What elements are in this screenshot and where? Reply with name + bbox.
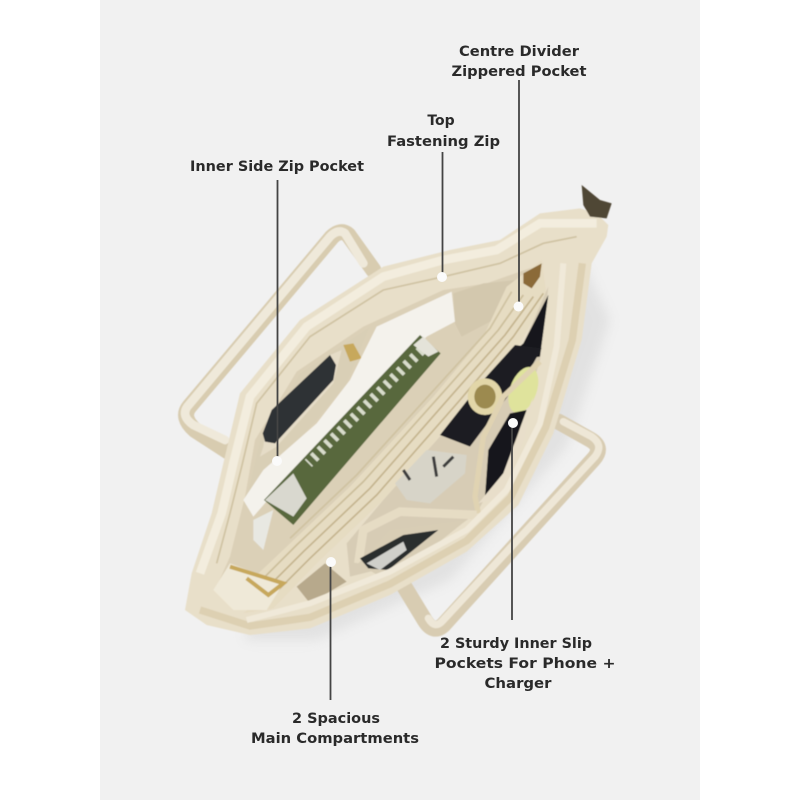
tote bag illustration [185,185,612,640]
bag shadow [243,263,610,640]
black phone item [440,345,542,447]
dark item in pocket [360,530,438,570]
centre divider with zipper [243,260,547,613]
front handle [403,422,599,629]
inner side zip pocket [247,327,370,497]
front rim band [247,263,563,620]
upper compartment interior [217,263,543,587]
label: slip pockets: 2 Sturdy Inner Slip [440,636,592,652]
label: main compartments: 2 Spacious [292,711,380,727]
top rim [200,223,597,573]
label: centre divider zippered pocket: Centre Divider [459,44,579,60]
leader line: centre divider [514,80,524,312]
earphones box [395,450,467,503]
pocket lining [260,350,342,457]
label: slip pockets: Pockets For Phone + [434,656,616,672]
gold coin charm [468,378,502,415]
leader line: top fastening zip [437,152,447,282]
label: main compartments [251,711,419,747]
leader line: slip pockets [508,418,518,620]
label: top fastening zip: Top [427,113,455,129]
pages under notebook [253,510,273,550]
green spiral notebook [264,335,441,525]
printed lining [453,280,517,337]
label: slip pockets [434,636,616,692]
charger slip pocket [358,512,477,577]
zip clasp [582,185,612,218]
label: top fastening zip: Fastening Zip [387,134,500,150]
back handle [185,231,373,452]
leader line: inner side zip pocket [272,180,282,466]
leader line: main compartments [326,557,336,700]
label: centre divider zippered pocket: Zippered Pocket [452,64,587,80]
background panel [100,0,700,800]
black lining area [497,295,548,367]
rim seam [217,237,577,563]
lower lining shadow [297,563,347,603]
label: main compartments: Main Compartments [251,731,419,747]
slip pocket for phone [475,362,540,513]
label: centre divider zippered pocket [452,44,587,80]
bottom rim [200,263,582,626]
spiral rings [308,350,422,463]
zip pull [343,343,362,362]
white page area [243,292,455,517]
bag body [185,208,608,635]
label: top fastening zip [387,113,500,150]
label: slip pockets: Charger [484,676,552,692]
zip pull [213,563,283,610]
divider pocket opening [523,263,542,288]
label: inner side zip pocket: Inner Side Zip Pocket [190,159,364,175]
dark item in pocket [263,355,336,443]
yellow lime [503,363,544,417]
lower compartment interior [347,287,548,577]
